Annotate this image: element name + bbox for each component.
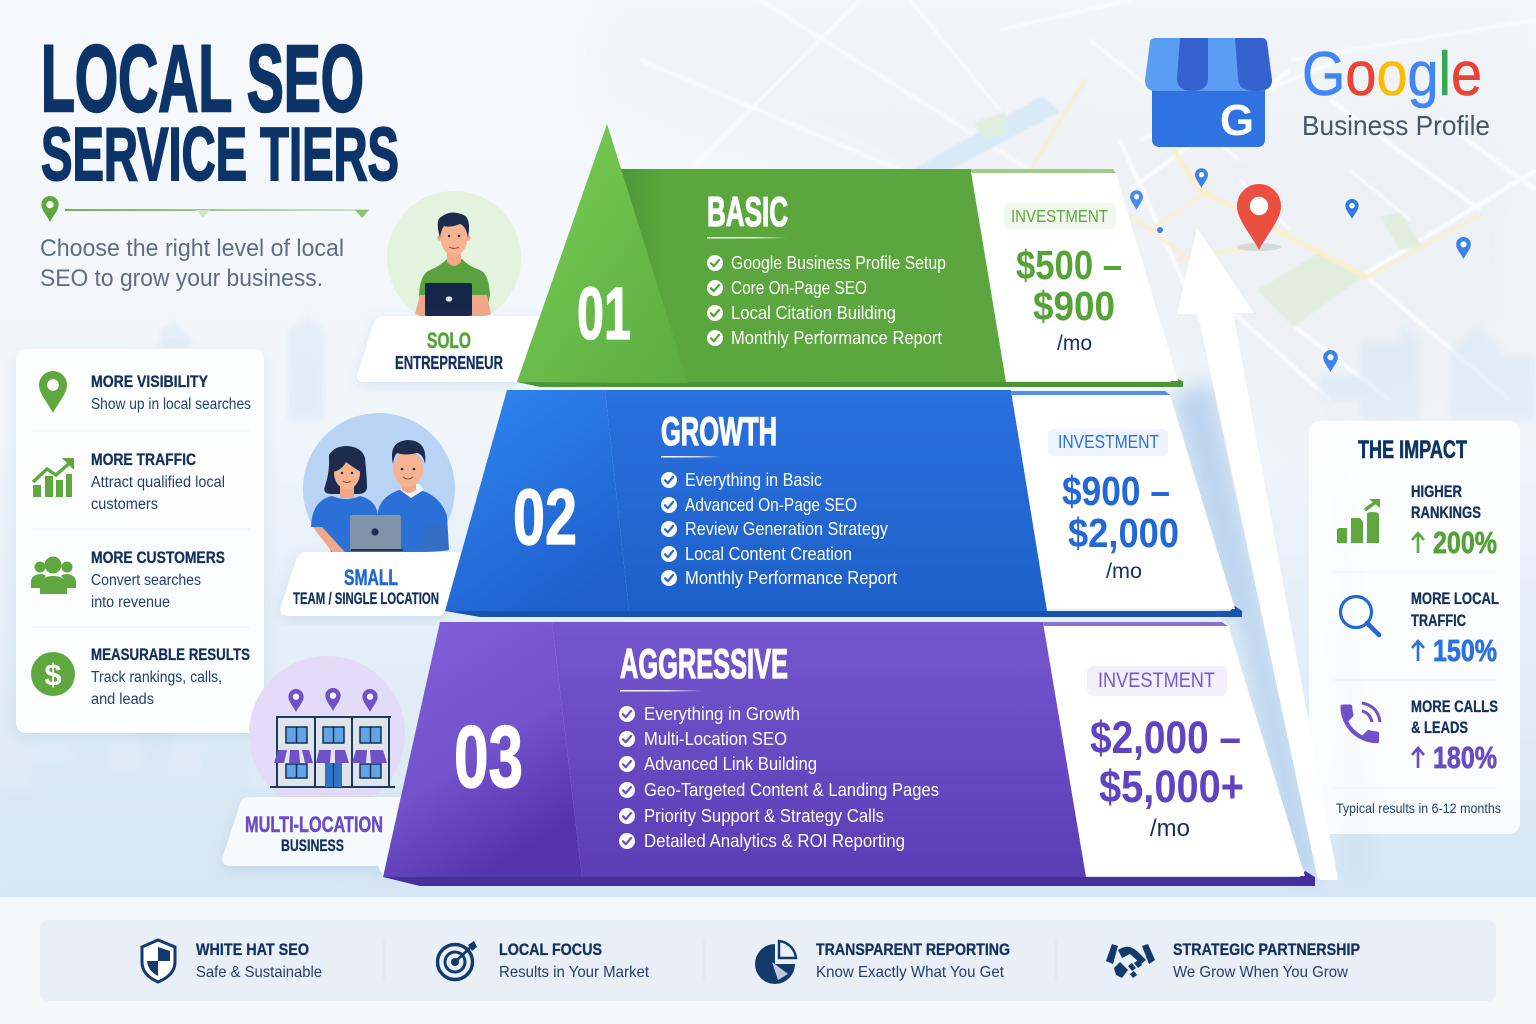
- guarantee: local focus: Results in Your Market: [499, 964, 650, 981]
- persona label: SOLO: [427, 328, 471, 353]
- feature list: [619, 704, 939, 851]
- feature list: Google Business Profile Setup: [731, 253, 946, 273]
- price panel: [1043, 622, 1305, 876]
- feature list: Monthly Performance Report: [731, 328, 942, 348]
- footnote: Typical results in 6-12 months: [1336, 800, 1501, 816]
- metric: more calls and leads: 180%: [1433, 740, 1497, 775]
- persona: solo entrepreneur: [357, 191, 540, 382]
- price panel: $900 –: [1062, 468, 1170, 514]
- feature list: Core On-Page SEO: [731, 278, 867, 298]
- footer strip: [0, 897, 1536, 1024]
- content band: [612, 169, 1006, 382]
- logo: google business profile: [1302, 40, 1490, 141]
- price panel: /mo: [1057, 332, 1092, 355]
- content band: [605, 390, 1047, 611]
- metric: higher rankings: 200%: [1433, 525, 1497, 560]
- guarantee: transparent reporting: [755, 940, 1010, 984]
- tier name: AGGRESSIVE: [620, 640, 788, 687]
- price panel: INVESTMENT: [1011, 206, 1108, 226]
- benefit: more traffic: MORE TRAFFIC: [91, 450, 196, 469]
- price panel: [1011, 391, 1235, 609]
- panel heading: THE IMPACT: [1358, 436, 1467, 464]
- price panel: $500 –: [1016, 242, 1122, 288]
- persona label: TEAM / SINGLE LOCATION: [293, 589, 439, 608]
- icon: google business profile store: G: [1220, 96, 1254, 145]
- content band: [552, 622, 1086, 877]
- price panel: $2,000 –: [1090, 712, 1241, 763]
- subtitle: [40, 235, 344, 292]
- logo: google business profile: Google: [1302, 40, 1482, 109]
- guarantee: white hat seo: Safe & Sustainable: [196, 964, 322, 981]
- feature list: Review Generation Strategy: [685, 519, 888, 539]
- title: [41, 26, 399, 196]
- feature list: Everything in Basic: [685, 470, 822, 490]
- persona label: [280, 552, 463, 616]
- illustration: storefront with pins: [270, 688, 395, 787]
- logo: google business profile: Business Profile: [1302, 110, 1490, 141]
- tier 3: aggressive: [383, 622, 1315, 886]
- benefit: more customers: into revenue: [91, 594, 170, 611]
- feature list: Monthly Performance Report: [685, 568, 897, 588]
- benefit: more traffic: Attract qualified local: [91, 474, 225, 491]
- tier 1: basic: [517, 124, 1184, 387]
- feature list: Geo-Targeted Content & Landing Pages: [644, 780, 939, 800]
- price panel: [971, 169, 1178, 381]
- metric: more calls and leads: [1340, 697, 1498, 775]
- price panel: /mo: [1106, 560, 1142, 583]
- metric: more calls and leads: & LEADS: [1411, 718, 1468, 737]
- metric: more local traffic: [1340, 589, 1499, 668]
- persona label: BUSINESS: [281, 836, 344, 855]
- tier 2: growth: [445, 390, 1242, 617]
- benefit: more visibility: MORE VISIBILITY: [91, 372, 209, 391]
- benefit: more customers: [31, 548, 225, 611]
- feature list: [707, 253, 946, 348]
- benefit: measurable results: [31, 645, 250, 708]
- benefit: more visibility: [39, 371, 251, 413]
- guarantee: transparent reporting: Know Exactly What You Get: [816, 964, 1005, 981]
- feature list: Detailed Analytics & ROI Reporting: [644, 831, 905, 851]
- left wedge: [383, 622, 582, 877]
- persona: small team: [280, 413, 463, 616]
- benefit: measurable results: $: [44, 657, 62, 692]
- metric: higher rankings: [1337, 482, 1497, 560]
- guarantee: local focus: [438, 940, 650, 981]
- feature list: Priority Support & Strategy Calls: [644, 806, 884, 826]
- guarantee: local focus: LOCAL FOCUS: [499, 940, 602, 959]
- price panel: INVESTMENT: [1058, 432, 1159, 452]
- benefit: measurable results: Track rankings, calls,: [91, 669, 222, 686]
- river: [912, 96, 1060, 170]
- guarantee: strategic partnership: [1106, 940, 1360, 981]
- feature list: Everything in Growth: [644, 704, 800, 724]
- metric: more calls and leads: MORE CALLS: [1411, 697, 1498, 716]
- metric: more local traffic: TRAFFIC: [1411, 611, 1466, 630]
- benefit: more customers: Convert searches: [91, 572, 201, 589]
- metric: higher rankings: RANKINGS: [1411, 503, 1481, 522]
- benefit: measurable results: and leads: [91, 691, 154, 708]
- persona: multi-location business: [222, 656, 412, 877]
- metric: higher rankings: HIGHER: [1411, 482, 1462, 501]
- title: LOCAL SEO: [41, 26, 364, 132]
- guarantee: strategic partnership: STRATEGIC PARTNERSHIP: [1173, 940, 1360, 959]
- guarantee: transparent reporting: TRANSPARENT REPORTING: [816, 940, 1010, 959]
- guarantee: strategic partnership: We Grow When You Grow: [1173, 964, 1348, 981]
- benefit: more visibility: Show up in local searches: [91, 396, 251, 413]
- metric: more local traffic: MORE LOCAL: [1411, 589, 1499, 608]
- title: SERVICE TIERS: [41, 112, 399, 196]
- panel: benefits: [16, 349, 264, 733]
- feature list: Local Citation Building: [731, 303, 896, 323]
- guarantee: white hat seo: [142, 940, 322, 982]
- feature list: Local Content Creation: [685, 544, 852, 564]
- left wedge: [445, 390, 629, 611]
- persona label: ENTREPRENEUR: [395, 353, 503, 373]
- benefit: measurable results: MEASURABLE RESULTS: [91, 645, 250, 664]
- tier number: 02: [513, 472, 577, 561]
- tier number: 01: [577, 272, 631, 355]
- persona label: SMALL: [344, 565, 398, 590]
- price panel: INVESTMENT: [1098, 669, 1215, 692]
- feature list: Advanced Link Building: [644, 754, 817, 774]
- icon: google business profile store: [1145, 38, 1272, 147]
- left triangle: [517, 124, 688, 383]
- feature list: Multi-Location SEO: [644, 729, 787, 749]
- tier name: BASIC: [707, 188, 788, 235]
- persona label: [222, 797, 412, 877]
- persona label: MULTI-LOCATION: [245, 812, 383, 837]
- illustration: person with laptop: [415, 213, 491, 316]
- benefit: more traffic: [33, 450, 225, 513]
- benefit: more traffic: customers: [91, 496, 158, 513]
- persona label: [357, 316, 540, 382]
- tier number: 03: [454, 707, 523, 806]
- price panel: /mo: [1150, 815, 1190, 842]
- feature list: [661, 470, 897, 588]
- growth arrow: [1170, 228, 1370, 880]
- price panel: $5,000+: [1099, 761, 1244, 812]
- background street map: [600, 0, 1536, 470]
- price panel: $2,000: [1068, 510, 1179, 556]
- background skyline: [0, 310, 1536, 897]
- price panel: $900: [1033, 283, 1115, 329]
- illustration: two people with laptop: [311, 440, 449, 552]
- feature list: Advanced On-Page SEO: [685, 495, 857, 515]
- map pins: [1130, 168, 1471, 372]
- panel: the impact: [1309, 421, 1520, 834]
- benefit: more customers: MORE CUSTOMERS: [91, 548, 225, 567]
- guarantee: white hat seo: WHITE HAT SEO: [196, 940, 309, 959]
- metric: more local traffic: 150%: [1433, 633, 1497, 668]
- tier name: GROWTH: [661, 410, 777, 454]
- subtitle: SEO to grow your business.: [40, 265, 323, 292]
- subtitle: Choose the right level of local: [40, 235, 344, 262]
- title divider with pin: [41, 196, 369, 222]
